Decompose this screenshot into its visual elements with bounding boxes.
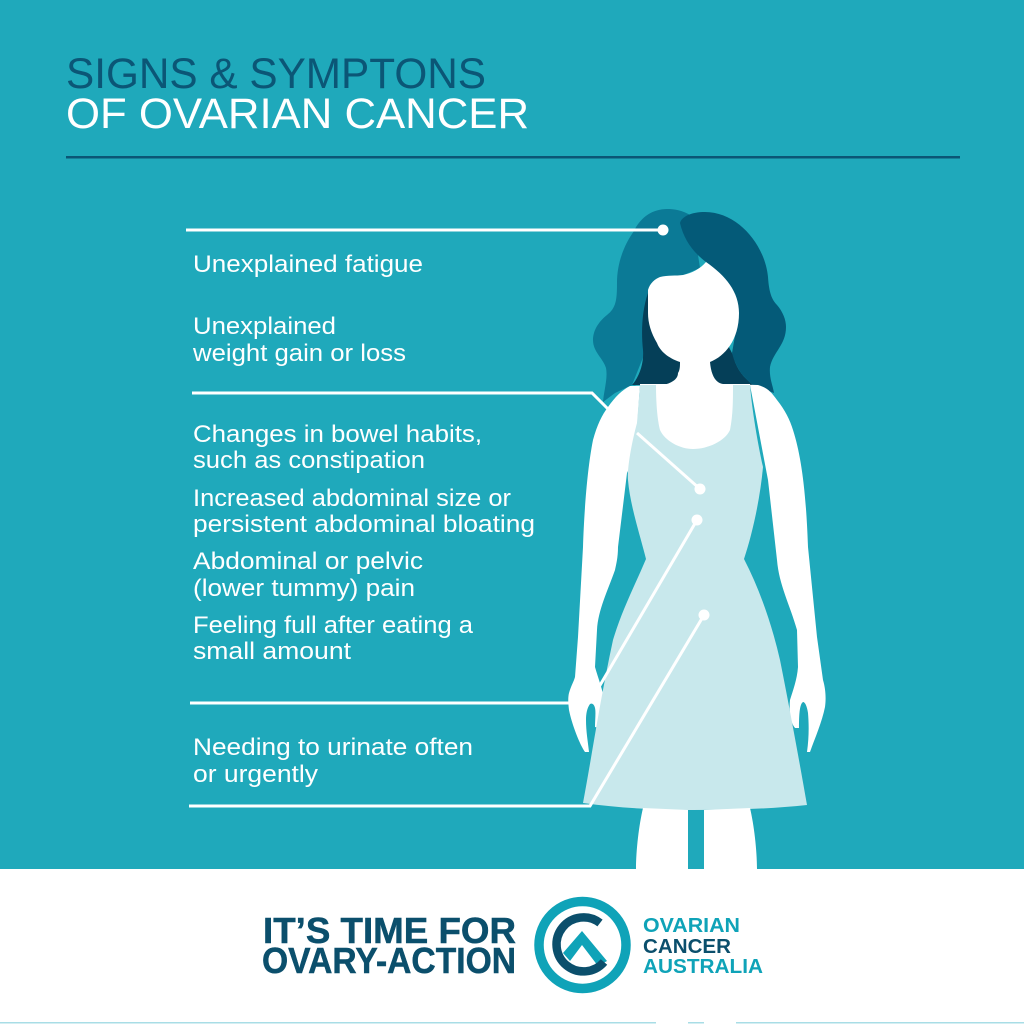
title bbox=[66, 50, 529, 138]
symptom list: Abdominal or pelvic bbox=[193, 548, 423, 575]
hair: right side bbox=[680, 212, 786, 393]
symptom list: Unexplained fatigue bbox=[193, 251, 423, 278]
logo mark bbox=[539, 902, 626, 988]
logo wordmark bbox=[643, 915, 763, 978]
symptom list: weight gain or loss bbox=[192, 340, 406, 367]
symptom list: or urgently bbox=[193, 761, 318, 788]
slogan: OVARY-ACTION bbox=[262, 940, 516, 981]
symptom list: Feeling full after eating a bbox=[193, 612, 474, 639]
symptom list: small amount bbox=[193, 638, 351, 665]
title: SIGNS & SYMPTONS bbox=[66, 50, 486, 98]
body bbox=[568, 262, 826, 752]
hair: left side bbox=[593, 209, 700, 402]
symptom list: such as constipation bbox=[193, 447, 425, 474]
symptom list bbox=[192, 251, 535, 788]
hair: shadow bbox=[632, 293, 753, 385]
symptom list: Unexplained bbox=[193, 313, 336, 340]
callout lines bbox=[186, 230, 704, 806]
legs bbox=[636, 808, 757, 869]
logo wordmark: AUSTRALIA bbox=[643, 956, 763, 978]
symptom list: Increased abdominal size or bbox=[193, 485, 511, 512]
title: OF OVARIAN CANCER bbox=[66, 90, 529, 138]
symptom list: Needing to urinate often bbox=[193, 734, 473, 761]
figure: woman in dress bbox=[568, 209, 826, 869]
torso under dress bbox=[640, 384, 750, 464]
symptom list: Changes in bowel habits, bbox=[193, 421, 482, 448]
symptom list: (lower tummy) pain bbox=[193, 575, 415, 602]
symptom list: persistent abdominal bloating bbox=[193, 511, 535, 538]
dress bbox=[583, 385, 807, 810]
logo wordmark: OVARIAN bbox=[643, 915, 740, 937]
callout dots bbox=[658, 224, 710, 620]
slogan: IT’S TIME FOR bbox=[263, 910, 516, 951]
footer band bbox=[0, 869, 1024, 1024]
slogan bbox=[262, 910, 516, 981]
logo wordmark: CANCER bbox=[643, 936, 732, 958]
